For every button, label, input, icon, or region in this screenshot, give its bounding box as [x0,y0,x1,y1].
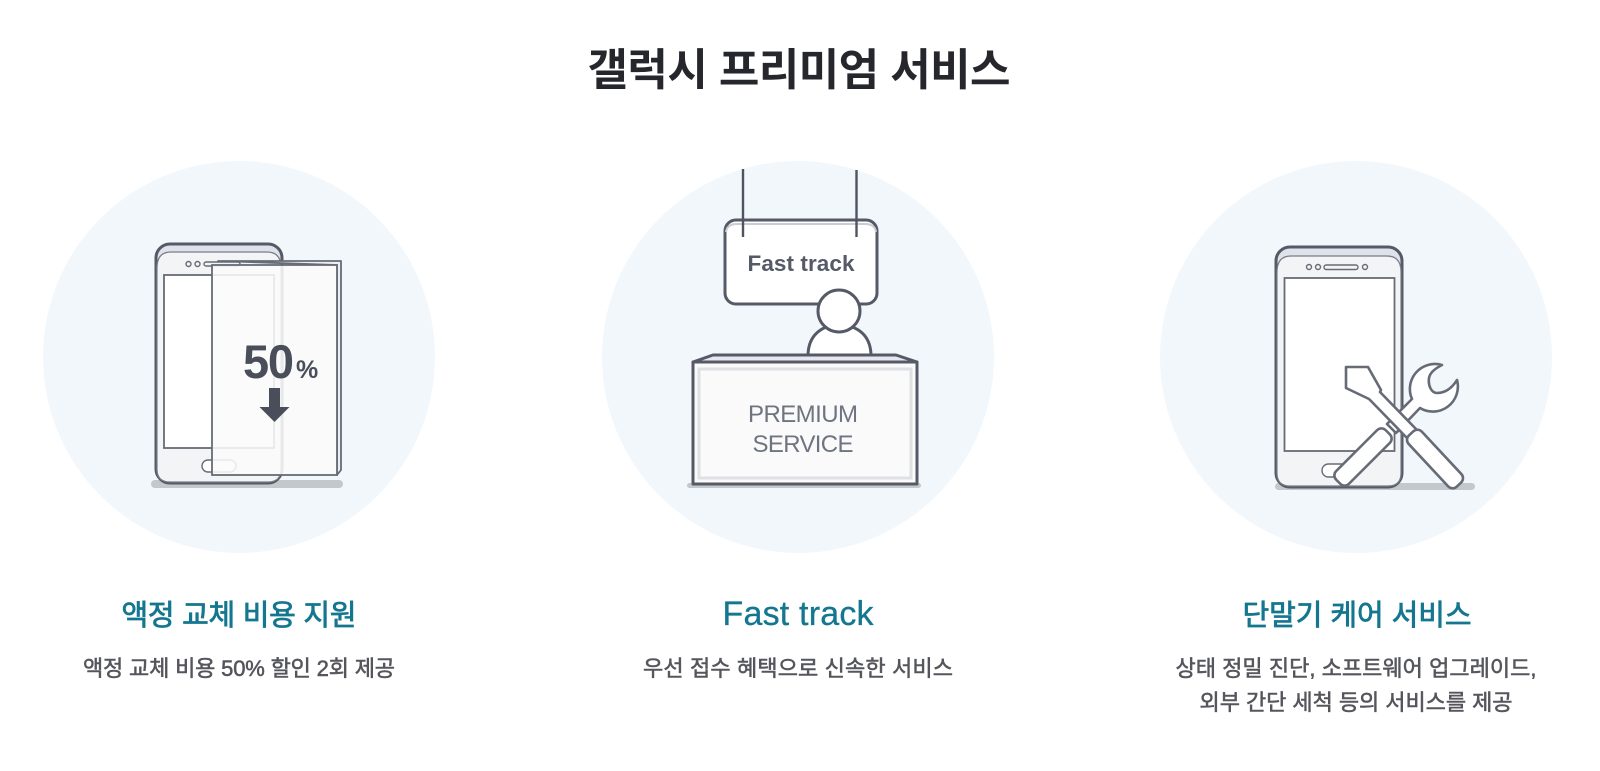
heading: 단말기 케어 서비스 [1242,599,1472,632]
panel: screen replacement support [43,161,435,681]
desk text line two: SERVICE [752,431,854,458]
icon: screwdriver [1346,367,1465,491]
icon: down arrow [260,388,290,422]
description: 외부 간단 세척 등의 서비스를 제공 [1200,690,1512,715]
panel: device care service [1160,161,1552,715]
discount figure: 50 [243,335,294,388]
background circle [43,161,435,553]
icon: discounted phone screen [151,244,343,488]
icon: phone with tools [1275,247,1475,491]
title: 갤럭시 프리미엄 서비스 [588,46,1010,95]
icon: service desk with hanging sign [687,169,921,488]
heading: Fast track [722,595,874,633]
panel: fast track [602,161,994,681]
description [1176,656,1536,715]
description: 상태 정밀 진단, 소프트웨어 업그레이드, [1176,656,1536,681]
background circle [1160,161,1552,553]
percent sign: % [296,356,318,384]
desk text: PREMIUM [748,401,858,428]
sign text: Fast track [748,251,855,276]
background circle [602,161,994,553]
heading: 액정 교체 비용 지원 [122,600,356,632]
description: 우선 접수 혜택으로 신속한 서비스 [643,656,953,681]
description: 액정 교체 비용 50% 할인 2회 제공 [83,656,395,681]
icon: wrench [1332,364,1458,488]
